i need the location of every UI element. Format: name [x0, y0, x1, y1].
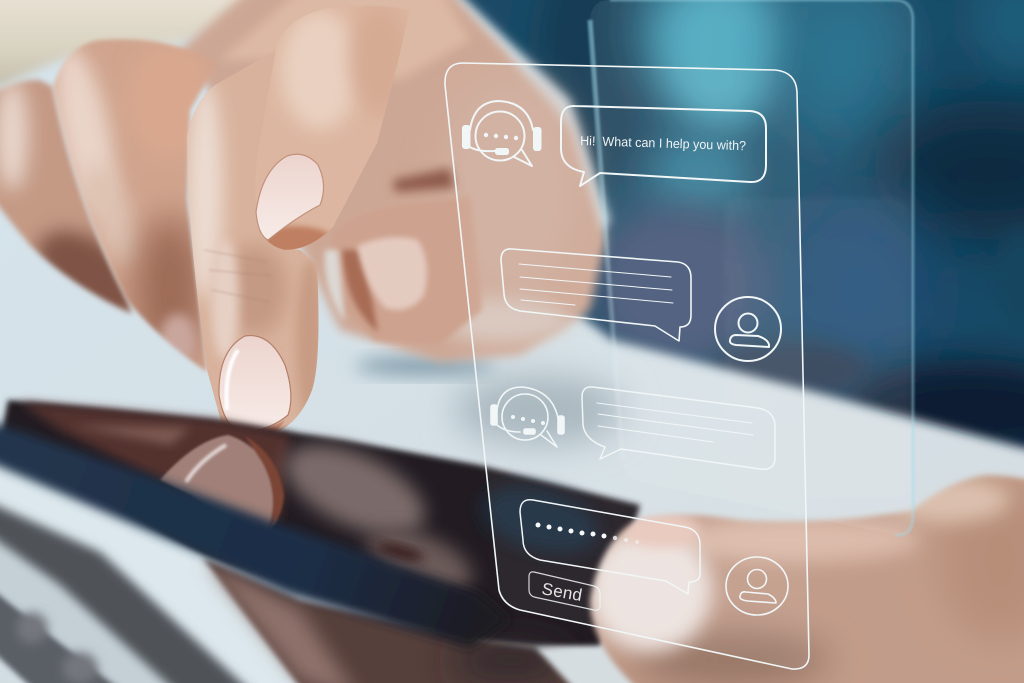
middle fingernail [256, 154, 324, 240]
far hand: blurred palm and thumb [180, 0, 606, 362]
input bubble with typed dots [520, 500, 700, 594]
far little finger at left [0, 76, 134, 316]
user reply bubble [501, 249, 691, 341]
icon: user avatar [715, 297, 781, 361]
agent reply bubble [582, 387, 775, 469]
white phone stand strip [0, 455, 320, 683]
keyboard at bottom left [0, 498, 260, 683]
icon: support agent with headset [463, 101, 540, 166]
background: grey haze through panel [455, 375, 625, 445]
chat panel [445, 63, 809, 669]
middle finger [264, 6, 406, 250]
icon: support agent 2 [491, 387, 564, 447]
icon: user avatar 2 [726, 557, 788, 615]
index fingernail [219, 336, 291, 438]
index finger [187, 64, 318, 432]
phone rim [0, 418, 510, 648]
holding thumb at bottom right [580, 470, 1024, 683]
background: blue screen at top right [440, 0, 1024, 480]
panel outline [445, 63, 809, 669]
greeting bubble [561, 106, 766, 186]
ghost inner card [725, 198, 910, 498]
ring finger [52, 37, 209, 373]
phone screen [0, 400, 640, 650]
send button [529, 572, 600, 610]
greeting text: Hi! What can I help you with? [580, 133, 746, 153]
white patch at bottom [536, 645, 620, 683]
background: beige wall at top left [0, 0, 265, 100]
reflected finger on phone screen [160, 435, 284, 530]
shadow under far hand [355, 357, 495, 375]
hand under the phone [203, 558, 600, 683]
send label: Send [540, 579, 584, 605]
rear glass panel [590, 0, 913, 535]
